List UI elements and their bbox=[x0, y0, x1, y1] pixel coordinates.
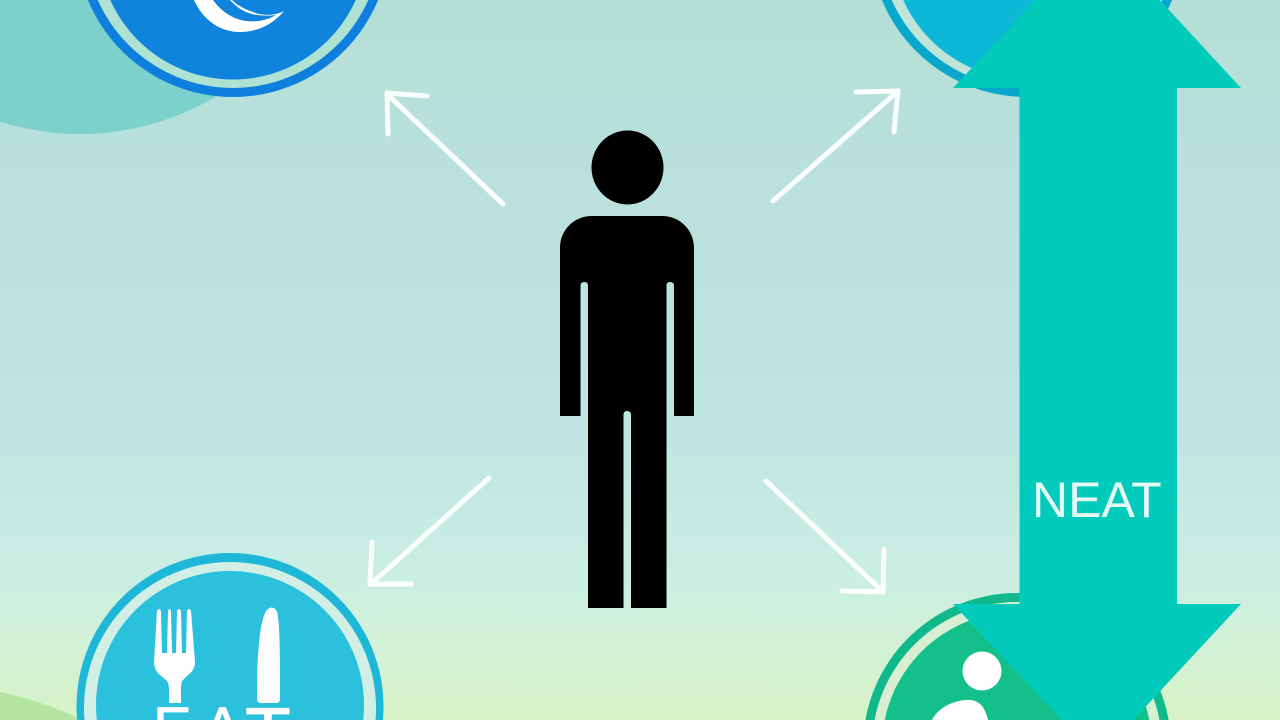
arrow: to bottom right bbox=[766, 481, 884, 592]
exercise icon circle top right bbox=[870, 0, 1184, 97]
icon: crescent moon bbox=[194, 0, 284, 32]
double-headed NEAT arrow bbox=[953, 0, 1241, 720]
label: NEAT: NEAT bbox=[1032, 472, 1162, 528]
icon: person body bbox=[932, 700, 988, 720]
sleep icon circle top left bbox=[76, 0, 390, 97]
eat icon circle bottom left bbox=[76, 553, 384, 720]
icon: person head bbox=[962, 652, 1002, 690]
arrow: to top right bbox=[773, 91, 898, 201]
arrow: to top left bbox=[387, 93, 503, 204]
arrow: to bottom left bbox=[370, 478, 489, 584]
central person figure bbox=[560, 130, 694, 608]
head bbox=[592, 130, 664, 204]
icon: knife bbox=[257, 608, 280, 703]
decorative teal blob top left bbox=[0, 0, 345, 134]
icon: fork bbox=[154, 609, 195, 703]
NEAT activity icon circle bottom right bbox=[863, 593, 1171, 720]
body bbox=[560, 216, 694, 608]
decorative green blob bottom left bbox=[0, 692, 82, 720]
